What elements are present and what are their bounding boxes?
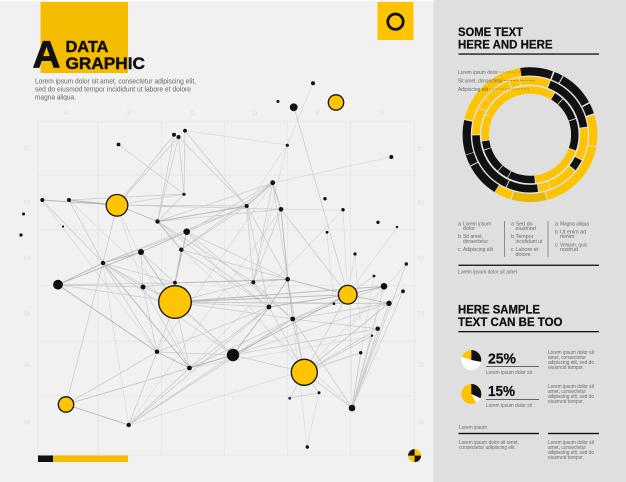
chart grid with axis labels: F (381, 111, 385, 117)
ring chart key: three columns: Sit amet, (463, 234, 483, 240)
yellow title block (40, 2, 128, 73)
ring chart key: three columns: minim (560, 234, 575, 240)
stat: 25 percent description: adipiscing elit, sed do (548, 360, 594, 366)
ring chart key: three columns: Magna aliqua (560, 222, 589, 228)
ring chart key: three columns: b (511, 234, 514, 240)
ring chart key: three columns: nostrud (560, 247, 578, 253)
outer ring (467, 71, 593, 198)
chart grid with axis labels: 06 (418, 420, 425, 426)
footer note right: eiusmod tempor. (548, 455, 584, 461)
ring chart key: three columns: a (511, 222, 514, 228)
stat: 25 percent description: amet, consectetur (548, 355, 586, 361)
icon: corner quadrant marker (408, 449, 421, 462)
intro text: sed do eiusmod tempor incididunt ut labore et dolore (35, 86, 191, 94)
intro text: magna aliqua. (35, 94, 76, 102)
heading: some text: SOME TEXT (458, 25, 524, 39)
icon: yellow square with ring (378, 2, 414, 40)
stat: 25 percent value (486, 350, 539, 376)
ring chart key: three columns: a (458, 222, 461, 228)
heading: here sample: HERE SAMPLE (458, 302, 540, 316)
heading: some text (458, 25, 553, 51)
ring chart key: three columns: c (511, 247, 514, 253)
stat: 25 percent value: 25% (488, 350, 516, 367)
stat: 15 percent value: Lorem ipsum dolor sit (486, 403, 532, 409)
chart grid with axis labels: 02 (418, 200, 425, 206)
ring chart key: three columns (458, 221, 589, 258)
ring chart key: three columns: Lorem ipsum (463, 222, 491, 228)
chart grid with axis labels: E (316, 111, 320, 117)
chart grid with axis labels: 05 (418, 363, 425, 369)
footer note right: amet, consectetur (548, 445, 586, 451)
chart grid with axis labels: 06 (24, 420, 31, 426)
stat: 15 percent value: 15% (488, 383, 515, 400)
ring chart key: three columns: donsectetur (463, 239, 488, 245)
ring chart key: three columns: Sed do (516, 222, 533, 228)
ring chart key: three columns: dolor (463, 226, 475, 232)
small nodes (19, 81, 408, 449)
footer note left: Lorem ipsum (459, 425, 487, 431)
footer note left (458, 425, 539, 451)
title: A (32, 34, 60, 76)
footer note left: consectetur adipiscing elit. (459, 445, 516, 451)
ring chart key: three columns: Labore et (516, 247, 539, 253)
chart grid with axis labels: 02 (24, 200, 31, 206)
heading: here sample: TEXT CAN BE TOO (458, 315, 562, 329)
middle ring (476, 81, 584, 189)
chart grid with axis labels: 03 (418, 256, 425, 262)
stat: 15 percent description: eiusmod tempor. (548, 399, 584, 405)
chart grid with axis labels: 01 (418, 146, 425, 152)
radial ring chart (467, 71, 593, 198)
chart grid with axis labels: 01 (24, 146, 31, 152)
scale bar (38, 456, 128, 462)
chart grid with axis labels: A (64, 111, 68, 117)
intro text: Lorem ipsum dolor sit amet, consectetur adipiscing elit, (35, 78, 196, 86)
ring chart key: three columns: Ut enim ad (560, 230, 586, 236)
intro text (35, 78, 196, 102)
inner ring (485, 90, 575, 179)
chart grid with axis labels: D (253, 111, 258, 117)
stat: 25 percent description: eiusmod tempor. (548, 365, 584, 371)
large dark nodes (53, 103, 387, 411)
ring chart key: three columns: dolore (516, 252, 530, 258)
stat: 15 percent description: adipiscing elit, sed do (548, 394, 594, 400)
panel: sidebar background (434, 0, 626, 482)
chart grid with axis labels: 04 (418, 312, 425, 318)
title: DATA (66, 39, 108, 56)
ring chart key: three columns: eiusmod (516, 226, 536, 232)
stat: 15 percent description (548, 384, 594, 405)
chart grid with axis labels: 05 (24, 363, 31, 369)
stat: 25 percent description (548, 350, 594, 371)
network chart (19, 81, 408, 449)
key caption: Lorem ipsum dolor sit amet (458, 270, 517, 276)
title (32, 34, 145, 76)
ring chart legend labels: Lorem ipsum dolor (458, 70, 498, 76)
ring chart key: three columns: Tempor (516, 234, 534, 240)
ring chart key: three columns: incididunt ut (516, 239, 543, 245)
network links (42, 83, 406, 447)
ring chart key: three columns: Adipiscing elit (463, 247, 493, 253)
ring chart key: three columns: a (555, 222, 558, 228)
ring chart key: three columns: b (458, 234, 461, 240)
ring chart key: three columns: c (555, 242, 558, 248)
ring chart key: three columns: b (555, 230, 558, 236)
heading: some text: HERE AND HERE (458, 37, 553, 51)
ring chart legend labels (458, 70, 535, 93)
stat: 15 percent description: amet, consectetur (548, 389, 586, 395)
ring chart key: three columns: Veniam, quis (560, 242, 587, 248)
chart grid with axis labels (24, 111, 425, 455)
heading: here sample (458, 302, 562, 329)
stat: 15 percent value (486, 383, 539, 409)
chart grid with axis labels: B (127, 111, 131, 117)
footer note right: adipiscing elit, sed do (548, 450, 594, 456)
chart grid with axis labels: 04 (24, 312, 31, 318)
ring chart key: three columns: c (458, 247, 461, 253)
chart grid with axis labels: 03 (24, 256, 31, 262)
footer note right: Lorem ipsum dolor sit (548, 440, 594, 446)
stat: 25 percent pie (461, 350, 481, 370)
ring chart legend labels: Sit amet, donsectetur (458, 78, 503, 84)
footer note left: Lorem ipsum dolor sit amet, (459, 440, 519, 446)
chart grid with axis labels: C (190, 111, 195, 117)
stat: 15 percent description: Lorem ipsum dolor sit (548, 384, 594, 390)
stat: 15 percent pie (461, 384, 481, 404)
stat: 25 percent value: Lorem ipsum dolor sit (486, 370, 532, 376)
title: GRAPHIC (66, 55, 145, 73)
ring chart legend labels: Adipiscing elit (458, 87, 488, 93)
yellow highlighted nodes (58, 95, 357, 412)
footer note right (548, 433, 599, 461)
stat: 25 percent description: Lorem ipsum dolor sit (548, 350, 594, 356)
